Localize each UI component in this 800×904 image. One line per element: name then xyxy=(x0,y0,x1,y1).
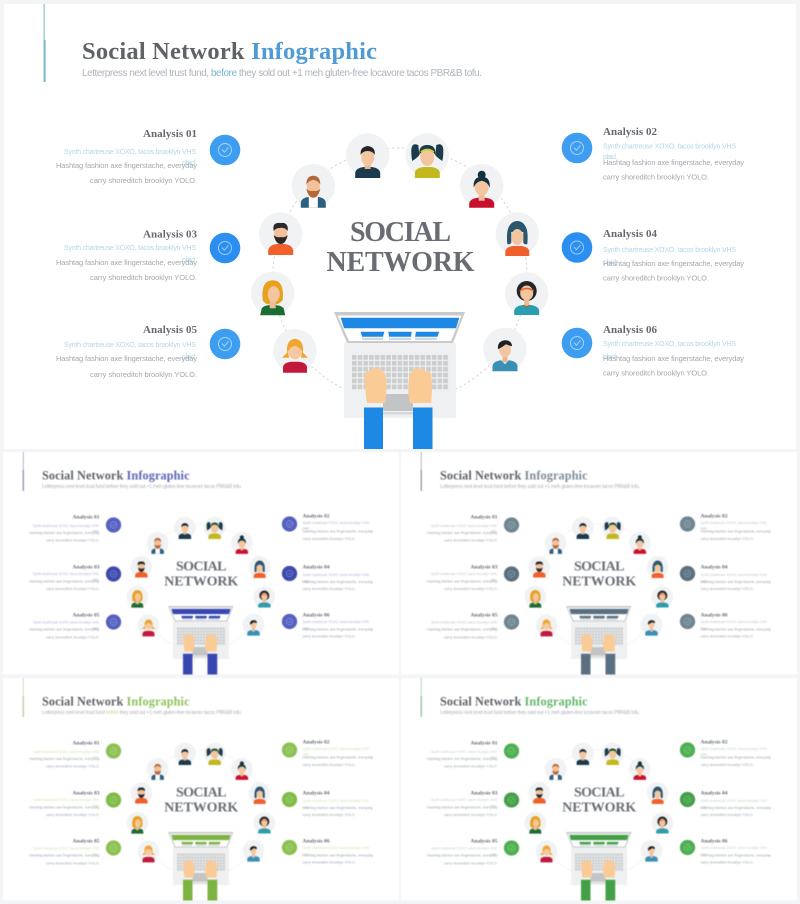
blocks and icons: Synth chartreuse XOXO, tacos brooklyn VHS xyxy=(33,524,100,528)
block: Analysis 04: Hashtag fashion axe fingerstache, everyday xyxy=(603,259,744,268)
center heading xyxy=(326,217,475,278)
block: Analysis 06: carry shoreditch brooklyn YOLO. xyxy=(603,368,709,378)
block: Analysis 05: plaid xyxy=(182,354,195,361)
block: Analysis 06: Hashtag fashion axe fingerstache, everyday xyxy=(603,354,744,363)
blocks and icons: plaid xyxy=(490,578,497,582)
laptop with hands xyxy=(566,832,632,900)
blocks and icons: Analysis 03 xyxy=(470,790,498,796)
slide: indigo xyxy=(3,452,399,674)
center heading: SOCIAL xyxy=(574,560,624,574)
blocks and icons: Synth chartreuse XOXO, tacos brooklyn VHS xyxy=(431,620,498,624)
blocks and icons: Synth chartreuse XOXO, tacos brooklyn VHS xyxy=(33,846,100,850)
blocks and icons: carry shoreditch brooklyn YOLO. xyxy=(46,538,100,542)
avatar: girl blonde pigtails xyxy=(273,329,317,373)
avatar: boy collar xyxy=(483,328,527,371)
blocks and icons: Hashtag fashion axe fingerstache, everyday xyxy=(427,854,498,858)
blocks and icons: carry shoreditch brooklyn YOLO. xyxy=(46,587,100,591)
blocks and icons: plaid xyxy=(92,578,99,582)
blocks and icons: Analysis 01 xyxy=(72,514,100,520)
block: Analysis 03: Hashtag fashion axe fingerstache, everyday xyxy=(56,258,197,267)
center heading: NETWORK xyxy=(562,800,636,816)
avatar: woman bob hair xyxy=(496,212,539,256)
blocks and icons: Analysis 03 xyxy=(72,790,100,796)
block: Analysis 06: plaid xyxy=(603,354,616,361)
blocks and icons: Analysis 03 xyxy=(470,564,498,570)
icon: check 05 xyxy=(210,329,240,359)
center heading xyxy=(164,786,238,816)
block: Analysis 01: carry shoreditch brooklyn YOLO. xyxy=(90,176,197,185)
block: Analysis 05: Synth chartreuse XOXO, tacos brooklyn VHS xyxy=(64,342,196,349)
slide: slate xyxy=(401,452,797,674)
slide: green xyxy=(401,678,797,900)
blocks and icons: carry shoreditch brooklyn YOLO. xyxy=(700,537,754,541)
blocks and icons: Hashtag fashion axe fingerstache, everyday xyxy=(302,806,373,810)
blocks and icons: Hashtag fashion axe fingerstache, everyday xyxy=(302,530,373,534)
blocks and icons: Hashtag fashion axe fingerstache, everyday xyxy=(29,531,100,535)
blocks and icons: plaid xyxy=(302,526,309,530)
blocks and icons: Synth chartreuse XOXO, tacos brooklyn VHS xyxy=(431,524,498,528)
blocks and icons: plaid xyxy=(700,805,707,809)
blocks and icons: Analysis 02 xyxy=(700,740,728,746)
blocks and icons: plaid xyxy=(490,804,497,808)
center heading: SOCIAL xyxy=(176,786,226,800)
block: Analysis 02: Synth chartreuse XOXO, tacos brooklyn VHS xyxy=(603,144,736,150)
blocks and icons: Analysis 05 xyxy=(470,612,498,618)
avatar: man black beard xyxy=(259,212,302,256)
title: Social Network Infographic xyxy=(440,468,588,482)
blocks and icons: Analysis 04 xyxy=(302,790,330,796)
block: Analysis 03: Synth chartreuse XOXO, tacos brooklyn VHS xyxy=(64,245,196,252)
title: Social Network Infographic xyxy=(42,694,190,708)
laptop with hands xyxy=(168,832,234,900)
blocks and icons: plaid xyxy=(302,626,309,630)
center heading: NETWORK xyxy=(326,247,475,278)
blocks and icons: Synth chartreuse XOXO, tacos brooklyn VHS xyxy=(700,846,768,850)
blocks and icons: Hashtag fashion axe fingerstache, everyday xyxy=(700,854,771,858)
blocks and icons: Analysis 06 xyxy=(700,838,728,844)
icon: check 06 xyxy=(562,328,592,358)
blocks and icons: plaid xyxy=(490,852,497,856)
center heading xyxy=(562,560,636,590)
laptop with hands xyxy=(168,606,234,674)
title: Social Network Infographic xyxy=(82,38,377,65)
icon: check 01 xyxy=(210,135,240,165)
blocks and icons: carry shoreditch brooklyn YOLO. xyxy=(302,587,356,591)
blocks and icons: Hashtag fashion axe fingerstache, everyday xyxy=(302,628,373,632)
blocks and icons: carry shoreditch brooklyn YOLO. xyxy=(444,538,498,542)
blocks and icons: carry shoreditch brooklyn YOLO. xyxy=(444,764,498,768)
block: Analysis 02: Analysis 02 xyxy=(603,126,658,138)
blocks and icons: Synth chartreuse XOXO, tacos brooklyn VHS xyxy=(700,573,768,577)
people ring xyxy=(524,517,673,651)
blocks and icons: Analysis 04 xyxy=(302,564,330,570)
blocks and icons: Analysis 06 xyxy=(302,838,330,844)
avatar: woman orange hair xyxy=(251,272,294,315)
people ring xyxy=(127,743,275,877)
block: Analysis 02 xyxy=(603,126,744,182)
accent line xyxy=(421,452,422,491)
blocks and icons: Synth chartreuse XOXO, tacos brooklyn VHS xyxy=(431,798,498,802)
blocks and icons: Synth chartreuse XOXO, tacos brooklyn VHS xyxy=(302,573,370,577)
block: Analysis 03: plaid xyxy=(182,257,195,264)
slide: light green xyxy=(3,678,399,900)
blocks and icons: Analysis 04 xyxy=(700,564,728,570)
blocks and icons: Hashtag fashion axe fingerstache, everyday xyxy=(427,531,498,535)
blocks and icons: Synth chartreuse XOXO, tacos brooklyn VHS xyxy=(33,798,100,802)
block: Analysis 04: Synth chartreuse XOXO, tacos brooklyn VHS xyxy=(603,247,736,254)
blocks and icons: Hashtag fashion axe fingerstache, everyday xyxy=(302,756,373,760)
blocks and icons: Synth chartreuse XOXO, tacos brooklyn VHS xyxy=(431,750,498,754)
blocks and icons: Analysis 02 xyxy=(302,740,330,746)
blocks and icons: Synth chartreuse XOXO, tacos brooklyn VHS xyxy=(302,846,370,850)
center heading: SOCIAL xyxy=(350,217,451,248)
block: Analysis 03: carry shoreditch brooklyn YOLO. xyxy=(90,273,197,282)
blocks and icons: Hashtag fashion axe fingerstache, everyday xyxy=(700,628,771,632)
blocks and icons: Hashtag fashion axe fingerstache, everyday xyxy=(700,580,771,584)
blocks and icons: Synth chartreuse XOXO, tacos brooklyn VHS xyxy=(431,572,498,576)
blocks and icons: Hashtag fashion axe fingerstache, everyday xyxy=(29,806,100,810)
subtitle: Letterpress next level trust fund before they sold out +1 meh gluten-free locavore tacos PBR&B tofu. xyxy=(440,484,640,490)
blocks and icons: Synth chartreuse XOXO, tacos brooklyn VHS xyxy=(700,521,768,525)
blocks and icons: Analysis 05 xyxy=(72,838,100,844)
blocks and icons: Hashtag fashion axe fingerstache, everyday xyxy=(427,628,498,632)
blocks and icons: plaid xyxy=(302,805,309,809)
blocks and icons: carry shoreditch brooklyn YOLO. xyxy=(46,862,100,866)
block: Analysis 01: Hashtag fashion axe fingerstache, everyday xyxy=(56,161,197,170)
block: Analysis 04 xyxy=(603,228,744,282)
blocks and icons: Hashtag fashion axe fingerstache, everyday xyxy=(700,806,771,810)
laptop with hands xyxy=(566,606,632,674)
subtitle: Letterpress next level trust fund, before they sold out +1 meh gluten-free locavore tacos PBR&B tofu. xyxy=(82,68,482,79)
blocks and icons: Hashtag fashion axe fingerstache, everyday xyxy=(29,580,100,584)
center heading: NETWORK xyxy=(164,800,238,816)
blocks and icons: plaid xyxy=(700,579,707,583)
blocks and icons: Synth chartreuse XOXO, tacos brooklyn VHS xyxy=(33,620,100,624)
blocks and icons: plaid xyxy=(490,626,497,630)
blocks and icons: plaid xyxy=(700,626,707,630)
blocks and icons: plaid xyxy=(302,752,309,756)
blocks and icons: Hashtag fashion axe fingerstache, everyday xyxy=(427,580,498,584)
blocks and icons: carry shoreditch brooklyn YOLO. xyxy=(444,862,498,866)
center heading: SOCIAL xyxy=(574,786,624,800)
block: Analysis 01: Analysis 01 xyxy=(143,128,197,140)
laptop with hands xyxy=(334,312,465,449)
block: Analysis 06: Synth chartreuse XOXO, tacos brooklyn VHS xyxy=(603,341,736,348)
icon: check 02 xyxy=(562,133,592,163)
avatar: man brown beard xyxy=(292,164,335,208)
block: Analysis 01: Synth chartreuse XOXO, tacos brooklyn VHS xyxy=(64,149,196,156)
blocks and icons: carry shoreditch brooklyn YOLO. xyxy=(302,763,356,767)
blocks and icons: Hashtag fashion axe fingerstache, everyday xyxy=(302,580,373,584)
blocks and icons: Analysis 05 xyxy=(72,612,100,618)
blocks and icons: plaid xyxy=(302,852,309,856)
blocks and icons: Hashtag fashion axe fingerstache, everyday xyxy=(29,854,100,858)
blocks and icons: Synth chartreuse XOXO, tacos brooklyn VHS xyxy=(33,572,100,576)
blocks and icons xyxy=(427,740,771,866)
blocks and icons: Analysis 03 xyxy=(72,564,100,570)
blocks and icons: Analysis 01 xyxy=(470,514,498,520)
blocks and icons: Analysis 01 xyxy=(470,740,498,746)
avatar: girl pigtails xyxy=(406,133,449,178)
subtitle: Letterpress next level trust fund before they sold out +1 meh gluten-free locavore tacos PBR&B tofu. xyxy=(42,484,242,490)
icon: check 04 xyxy=(562,232,592,263)
blocks and icons: plaid xyxy=(92,756,99,760)
blocks and icons: carry shoreditch brooklyn YOLO. xyxy=(302,634,356,638)
title: Social Network Infographic xyxy=(42,468,190,482)
blocks and icons: Hashtag fashion axe fingerstache, everyday xyxy=(29,757,100,761)
blocks and icons: carry shoreditch brooklyn YOLO. xyxy=(444,636,498,640)
center heading: SOCIAL xyxy=(176,560,226,574)
blocks and icons: Analysis 02 xyxy=(700,514,728,520)
accent line xyxy=(421,678,422,717)
blocks and icons: plaid xyxy=(302,579,309,583)
block: Analysis 05: Hashtag fashion axe fingerstache, everyday xyxy=(56,354,197,363)
blocks and icons: carry shoreditch brooklyn YOLO. xyxy=(46,813,100,817)
accent line xyxy=(44,4,46,82)
blocks and icons: plaid xyxy=(92,626,99,630)
block: Analysis 05: Analysis 05 xyxy=(143,324,198,336)
blocks and icons: Synth chartreuse XOXO, tacos brooklyn VHS xyxy=(700,620,768,624)
blocks and icons: Synth chartreuse XOXO, tacos brooklyn VHS xyxy=(302,799,370,803)
blocks and icons: plaid xyxy=(700,852,707,856)
blocks and icons: plaid xyxy=(490,530,497,534)
blocks and icons: Synth chartreuse XOXO, tacos brooklyn VHS xyxy=(700,747,768,751)
blocks and icons: Analysis 06 xyxy=(302,612,330,618)
blocks and icons: Synth chartreuse XOXO, tacos brooklyn VHS xyxy=(700,799,768,803)
subtitle: Letterpress next level trust fund before they sold out +1 meh gluten-free locavore tacos PBR&B tofu. xyxy=(440,710,640,716)
blocks and icons: Synth chartreuse XOXO, tacos brooklyn VHS xyxy=(431,846,498,850)
blocks and icons: carry shoreditch brooklyn YOLO. xyxy=(700,763,754,767)
avatar: man dark shirt xyxy=(346,133,389,178)
block: Analysis 03 xyxy=(56,228,198,282)
blocks and icons: carry shoreditch brooklyn YOLO. xyxy=(700,587,754,591)
blocks and icons: Hashtag fashion axe fingerstache, everyday xyxy=(29,628,100,632)
blocks and icons: carry shoreditch brooklyn YOLO. xyxy=(302,813,356,817)
blocks and icons: plaid xyxy=(92,804,99,808)
blocks and icons: carry shoreditch brooklyn YOLO. xyxy=(444,813,498,817)
blocks and icons: carry shoreditch brooklyn YOLO. xyxy=(444,587,498,591)
people ring xyxy=(251,133,548,402)
block: Analysis 05 xyxy=(56,324,198,379)
blocks and icons: Analysis 06 xyxy=(700,612,728,618)
block: Analysis 04: Analysis 04 xyxy=(603,228,658,240)
blocks and icons: carry shoreditch brooklyn YOLO. xyxy=(700,634,754,638)
blocks and icons: carry shoreditch brooklyn YOLO. xyxy=(700,813,754,817)
accent line xyxy=(23,678,24,717)
avatar: woman bun xyxy=(460,164,503,208)
blocks and icons xyxy=(427,514,771,640)
people ring xyxy=(524,743,673,877)
blocks and icons: carry shoreditch brooklyn YOLO. xyxy=(700,860,754,864)
subtitle: Letterpress next level trust fund before they sold out +1 meh gluten-free locavore tacos PBR&B tofu. xyxy=(42,710,242,716)
blocks and icons: plaid xyxy=(700,752,707,756)
blocks and icons xyxy=(29,740,373,866)
people ring xyxy=(127,517,275,651)
block: Analysis 04: carry shoreditch brooklyn YOLO. xyxy=(603,274,709,282)
blocks and icons: Analysis 04 xyxy=(700,790,728,796)
blocks and icons: Synth chartreuse XOXO, tacos brooklyn VHS xyxy=(302,747,370,751)
blocks and icons: carry shoreditch brooklyn YOLO. xyxy=(302,860,356,864)
center heading xyxy=(562,786,636,816)
block: Analysis 03: Analysis 03 xyxy=(143,228,198,240)
center heading xyxy=(164,560,238,590)
blocks and icons: plaid xyxy=(92,852,99,856)
block: Analysis 02: carry shoreditch brooklyn YOLO. xyxy=(603,172,709,182)
blocks and icons: Hashtag fashion axe fingerstache, everyday xyxy=(427,806,498,810)
block: Analysis 06 xyxy=(603,324,744,378)
blocks and icons: plaid xyxy=(700,526,707,530)
blocks and icons: Hashtag fashion axe fingerstache, everyday xyxy=(700,530,771,534)
center heading: NETWORK xyxy=(164,574,238,590)
accent line xyxy=(23,452,24,491)
blocks and icons: plaid xyxy=(490,756,497,760)
blocks and icons: Analysis 01 xyxy=(72,740,100,746)
block: Analysis 02: plaid xyxy=(603,154,616,161)
block: Analysis 06: Analysis 06 xyxy=(603,324,658,336)
block: Analysis 04: plaid xyxy=(603,260,616,266)
block: Analysis 02: Hashtag fashion axe fingerstache, everyday xyxy=(603,158,744,167)
blocks and icons: Synth chartreuse XOXO, tacos brooklyn VHS xyxy=(33,750,100,754)
blocks and icons: carry shoreditch brooklyn YOLO. xyxy=(302,537,356,541)
blocks and icons: Hashtag fashion axe fingerstache, everyday xyxy=(427,757,498,761)
blocks and icons: carry shoreditch brooklyn YOLO. xyxy=(46,764,100,768)
blocks and icons xyxy=(29,514,373,640)
blocks and icons: plaid xyxy=(92,530,99,534)
blocks and icons: Synth chartreuse XOXO, tacos brooklyn VHS xyxy=(302,620,370,624)
center heading: NETWORK xyxy=(562,574,636,590)
blocks and icons: Synth chartreuse XOXO, tacos brooklyn VHS xyxy=(302,521,370,525)
blocks and icons: Hashtag fashion axe fingerstache, everyday xyxy=(302,854,373,858)
avatar: woman with headband xyxy=(505,272,548,316)
title: Social Network Infographic xyxy=(440,694,588,708)
block: Analysis 01: plaid xyxy=(182,160,195,167)
blocks and icons: carry shoreditch brooklyn YOLO. xyxy=(46,636,100,640)
slide: main blue xyxy=(4,4,796,449)
icon: check 03 xyxy=(210,233,240,263)
blocks and icons: Analysis 02 xyxy=(302,514,330,520)
block: Analysis 01 xyxy=(56,128,197,185)
blocks and icons: Hashtag fashion axe fingerstache, everyday xyxy=(700,756,771,760)
block: Analysis 05: carry shoreditch brooklyn YOLO. xyxy=(90,370,197,379)
blocks and icons: Analysis 05 xyxy=(470,838,498,844)
